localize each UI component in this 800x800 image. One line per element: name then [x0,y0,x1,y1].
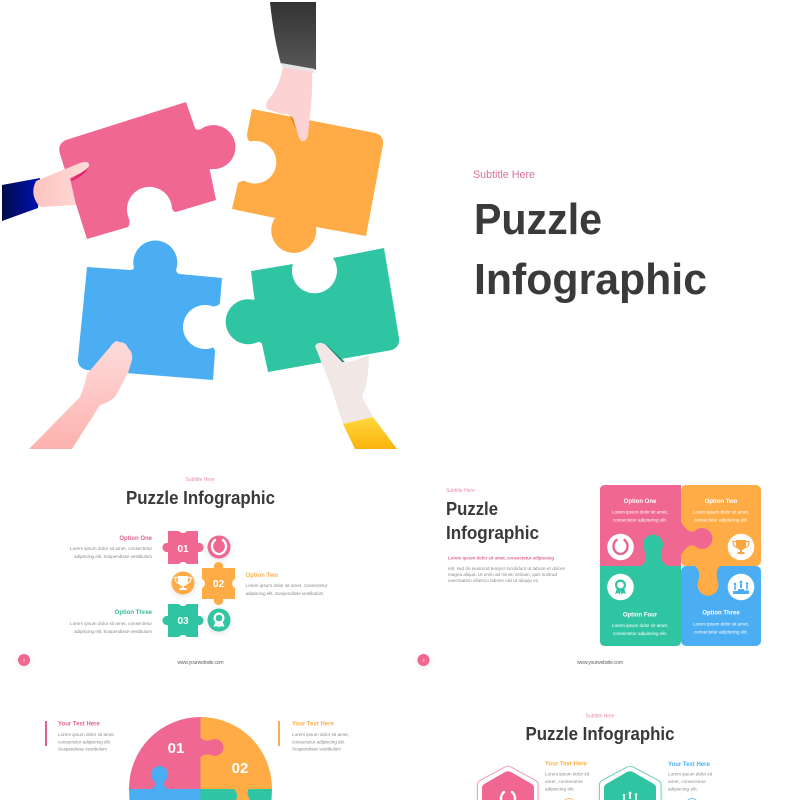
icon: laurel [607,534,634,560]
subtitle: Subtitle Here [186,477,215,483]
body text: elit, sed do eiusmod tempor incididunt ut labore et dolore [448,566,565,571]
piece: green [600,535,681,646]
callout: left text: consectetur adipiscing elit. [58,740,111,744]
option four label: consectetur adipiscing elit. [613,631,667,636]
callout: right text: Lorem ipsum dolor sit amet, [292,732,349,737]
website: www.yourwebsite.com [577,660,623,666]
text: blue callout: Lorem ipsum dolor sit [668,772,713,776]
title: Puzzle [474,195,602,244]
segment: pink [129,717,200,789]
option one text: Lorem ipsum dolor sit amet, consectetur [70,546,152,551]
tab: orange into green [234,789,250,800]
circle puzzle [129,717,272,800]
option three text: adipiscing elit. Suspendisse vestibulum [74,629,152,634]
page number: 3 [423,658,425,662]
heading: Infographic [446,522,539,543]
callout: left text [45,721,115,752]
option one label [612,499,668,522]
subtitle: Subtitle Here [586,714,615,720]
option two text: adipiscing elit. Suspendisse vestibulum [246,591,324,596]
tab: blue into pink [151,766,168,789]
hexagon: pink [478,766,538,800]
icon: podium [622,792,638,800]
puzzle piece: orange [232,109,383,253]
hand: bottom left [29,341,132,449]
icon: laurel [501,792,515,800]
option two text: Option Two [246,573,278,579]
heading [446,498,539,543]
icon: trophy [728,534,754,560]
piece: orange [681,485,761,566]
icon: trophy badge [172,572,194,594]
icon: orange ring [562,798,576,800]
piece: pink [600,485,713,566]
puzzle 01: 01 [177,544,189,555]
option one label: Lorem ipsum dolor sit amet, [612,510,668,514]
puzzle 01 [162,531,204,564]
option one text: Option One [119,536,153,542]
option two label: Option Two [705,499,738,505]
panel: three options slide [18,477,328,666]
segment: blue [129,789,200,800]
segment: orange [200,717,272,789]
option one label: consectetur adipiscing elit. [613,518,667,522]
hand: left [33,162,89,207]
page number: 2 [23,658,25,662]
text: orange callout: amet, consectetur [545,779,583,784]
body text: exercitation ullamco laboris nisi ut aliquip ex [448,578,539,583]
puzzle 03: 03 [177,616,189,627]
page number [418,654,430,666]
option one text [70,536,153,559]
hexagon: green [600,766,661,800]
option four label: Option Four [623,612,658,618]
number 02: 02 [232,760,248,777]
text: blue callout: amet, consectetur [668,779,706,784]
body text [448,566,565,583]
option three label: Lorem ipsum dolor sit amet, [693,622,749,626]
puzzle grid [600,485,761,646]
text: orange callout: Lorem ipsum dolor sit [545,772,590,776]
arm: dark suit sleeve top [270,2,316,73]
option three label: consectetur adipiscing elit. [694,630,748,634]
option three label: Option Three [702,610,740,616]
text: orange callout: adipiscing elit. [545,786,575,792]
icon: ribbon badge [208,608,230,632]
heading: Puzzle Infographic [126,488,275,508]
option four label: Lorem ipsum dolor sit amet, [612,623,668,628]
heading: Puzzle [446,498,498,519]
puzzle 02: 02 [213,579,224,590]
option three text [70,610,153,634]
title: Infographic [474,255,707,304]
text: blue callout: adipiscing elit. [668,786,698,792]
option two label [693,499,749,522]
tab: pink into orange [200,738,223,757]
puzzle 02 [202,562,235,605]
hand: top [266,67,312,142]
page number [18,654,30,666]
option one text: adipiscing elit. Suspendisse vestibulum [74,554,152,559]
tab: orange into blue [695,566,720,596]
puzzle piece: pink [59,102,235,239]
icon: blue ring [686,798,698,800]
text: blue callout [668,762,713,792]
segment: green [200,789,272,800]
panel: circular puzzle slide [45,717,349,800]
option two text [246,573,328,596]
heading: Puzzle Infographic [526,724,674,744]
callout: right text: consectetur adipiscing elit. [292,740,345,744]
panel: four options slide [418,485,761,666]
callout: left text: Suspendisse vestibulum [58,746,107,752]
title [474,195,707,304]
option three text: Lorem ipsum dolor sit amet, consectetur [70,621,152,626]
option two label: consectetur adipiscing elit. [694,518,748,522]
puzzle piece: blue [78,241,222,380]
text: orange callout [545,762,590,792]
option two text: Lorem ipsum dolor sit amet, consectetur [246,583,328,588]
hand: bottom right [315,343,373,424]
text: orange callout: Your Text Here [545,762,587,768]
lead text: Lorem ipsum dolor sit amet, consectetur adipiscing [448,556,554,560]
panel: hexagon slide [478,714,713,800]
text: blue callout: Your Text Here [668,762,710,768]
subtitle: Subtitle Here [446,488,475,494]
option one label: Option One [624,499,657,505]
option four label [612,612,668,636]
puzzle 03 [162,604,204,637]
callout: right text: Your Text Here [292,722,334,728]
option three text: Option Three [115,610,153,616]
website: www.yourwebsite.com [178,660,224,666]
option two label: Lorem ipsum dolor sit amet, [693,510,749,514]
puzzle piece: green [226,248,399,372]
arm: yellow sleeve [343,417,397,449]
number 01: 01 [168,740,184,757]
panel: hero slide [2,2,707,449]
body text: magna aliqua. Ut enim ad minim veniam, quis nostrud [448,572,557,577]
option three label [693,610,749,634]
callout: right text [278,721,349,752]
icon: ribbon [607,574,634,600]
callout: left text: Your Text Here [58,722,100,728]
callout: right text: Suspendisse vestibulum [292,746,341,752]
piece: blue [681,566,761,646]
callout: left text: Lorem ipsum dolor sit amet, [58,732,115,737]
icon: laurel badge [208,536,230,558]
arm: navy sleeve left [2,178,40,221]
subtitle: Subtitle Here [473,169,535,181]
icon: podium [728,574,754,600]
